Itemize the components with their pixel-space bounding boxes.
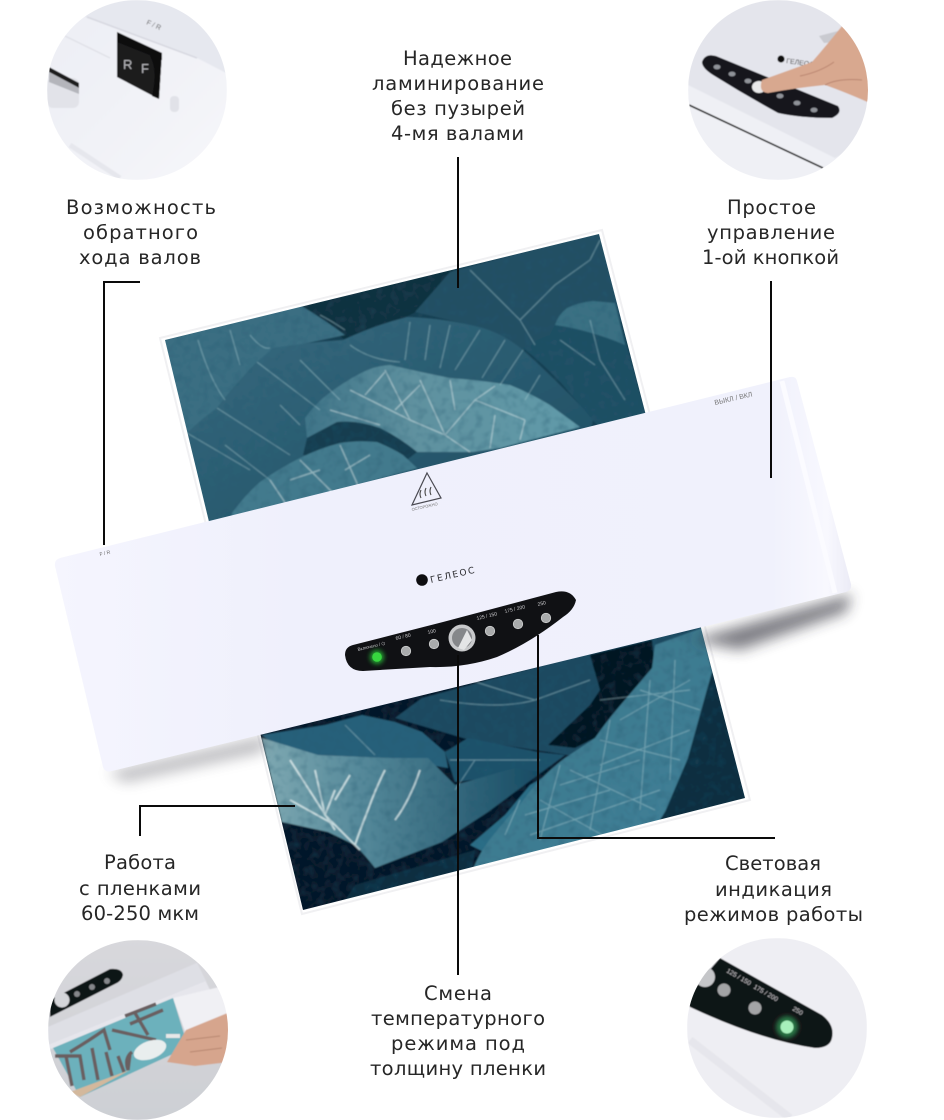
bottom leaves	[260, 627, 723, 910]
leader lines	[104, 157, 775, 975]
label: films: 60-250 мкм	[81, 902, 199, 925]
label: films	[79, 851, 201, 925]
label: light indication	[684, 852, 863, 926]
label: temperature: Смена	[424, 982, 492, 1005]
brand logo: ГЕЛЕОС	[429, 566, 476, 586]
control panel: 125 / 150	[476, 611, 498, 622]
label: films: с пленками	[79, 877, 201, 900]
label: light indication: режимов работы	[684, 903, 863, 926]
photo circle: light indicator	[685, 938, 867, 1118]
power label: ВЫКЛ / ВКЛ	[714, 391, 754, 407]
labels	[66, 47, 863, 1080]
photo circle: light indicator: 175 / 200	[752, 984, 779, 1003]
control panel: Включено / ⏻	[357, 641, 386, 652]
label: lamination without bubbles: ламинирование	[372, 72, 544, 95]
laminated photo sheet	[150, 225, 760, 925]
label: lamination without bubbles: Надежное	[403, 47, 512, 70]
control panel: 100	[427, 628, 437, 636]
body shadow	[690, 594, 852, 650]
label: lamination without bubbles	[372, 47, 544, 145]
label: temperature: толщину пленки	[370, 1057, 546, 1080]
label: temperature	[370, 982, 546, 1080]
label: reverse: хода валов	[79, 246, 201, 269]
photo circle: light indicator: 250	[791, 1006, 804, 1017]
label: temperature: режима под	[391, 1032, 525, 1055]
green power indicator	[370, 650, 384, 664]
top veins	[187, 240, 625, 480]
photo circle: light indicator: 125 / 150	[725, 968, 752, 987]
label: simple control	[702, 196, 839, 269]
label: simple control: 1-ой кнопкой	[702, 246, 839, 269]
label: light indication: индикация	[715, 878, 832, 901]
label: light indication: Световая	[725, 852, 821, 875]
icon: heat warning: ОСТОРОЖНО	[411, 501, 438, 512]
photo circle: one-button control: ГЕЛЕОС	[786, 58, 815, 69]
photo circle: one-button control	[688, 0, 872, 180]
laminator body	[55, 377, 852, 782]
control panel: 60 / 80	[395, 633, 412, 642]
top leaves	[304, 270, 453, 339]
photo circle: reverse switch	[47, 0, 230, 180]
label: lamination without bubbles: 4-мя валами	[391, 122, 524, 145]
control panel: 175 / 200	[504, 604, 526, 615]
control panel	[345, 591, 576, 671]
label: temperature: температурного	[371, 1007, 545, 1030]
photo circle: reverse switch: F / R	[145, 19, 162, 32]
bottom veins	[290, 760, 420, 850]
label: reverse	[66, 196, 216, 269]
photo circle: reverse switch: F	[141, 61, 149, 76]
control panel: 250	[537, 600, 547, 608]
icon: heat warning	[411, 473, 441, 512]
dial button	[448, 624, 476, 652]
label: reverse: обратного	[83, 221, 198, 244]
switch label: F / R	[99, 550, 111, 558]
label: lamination without bubbles: без пузырей	[391, 97, 525, 120]
photo circle: film insertion	[48, 940, 230, 1120]
photo circle: reverse switch: R	[123, 57, 132, 72]
label: simple control: управление	[707, 221, 835, 244]
label: reverse: Возможность	[66, 196, 216, 219]
label: films: Работа	[104, 851, 176, 874]
label: simple control: Простое	[727, 196, 816, 219]
